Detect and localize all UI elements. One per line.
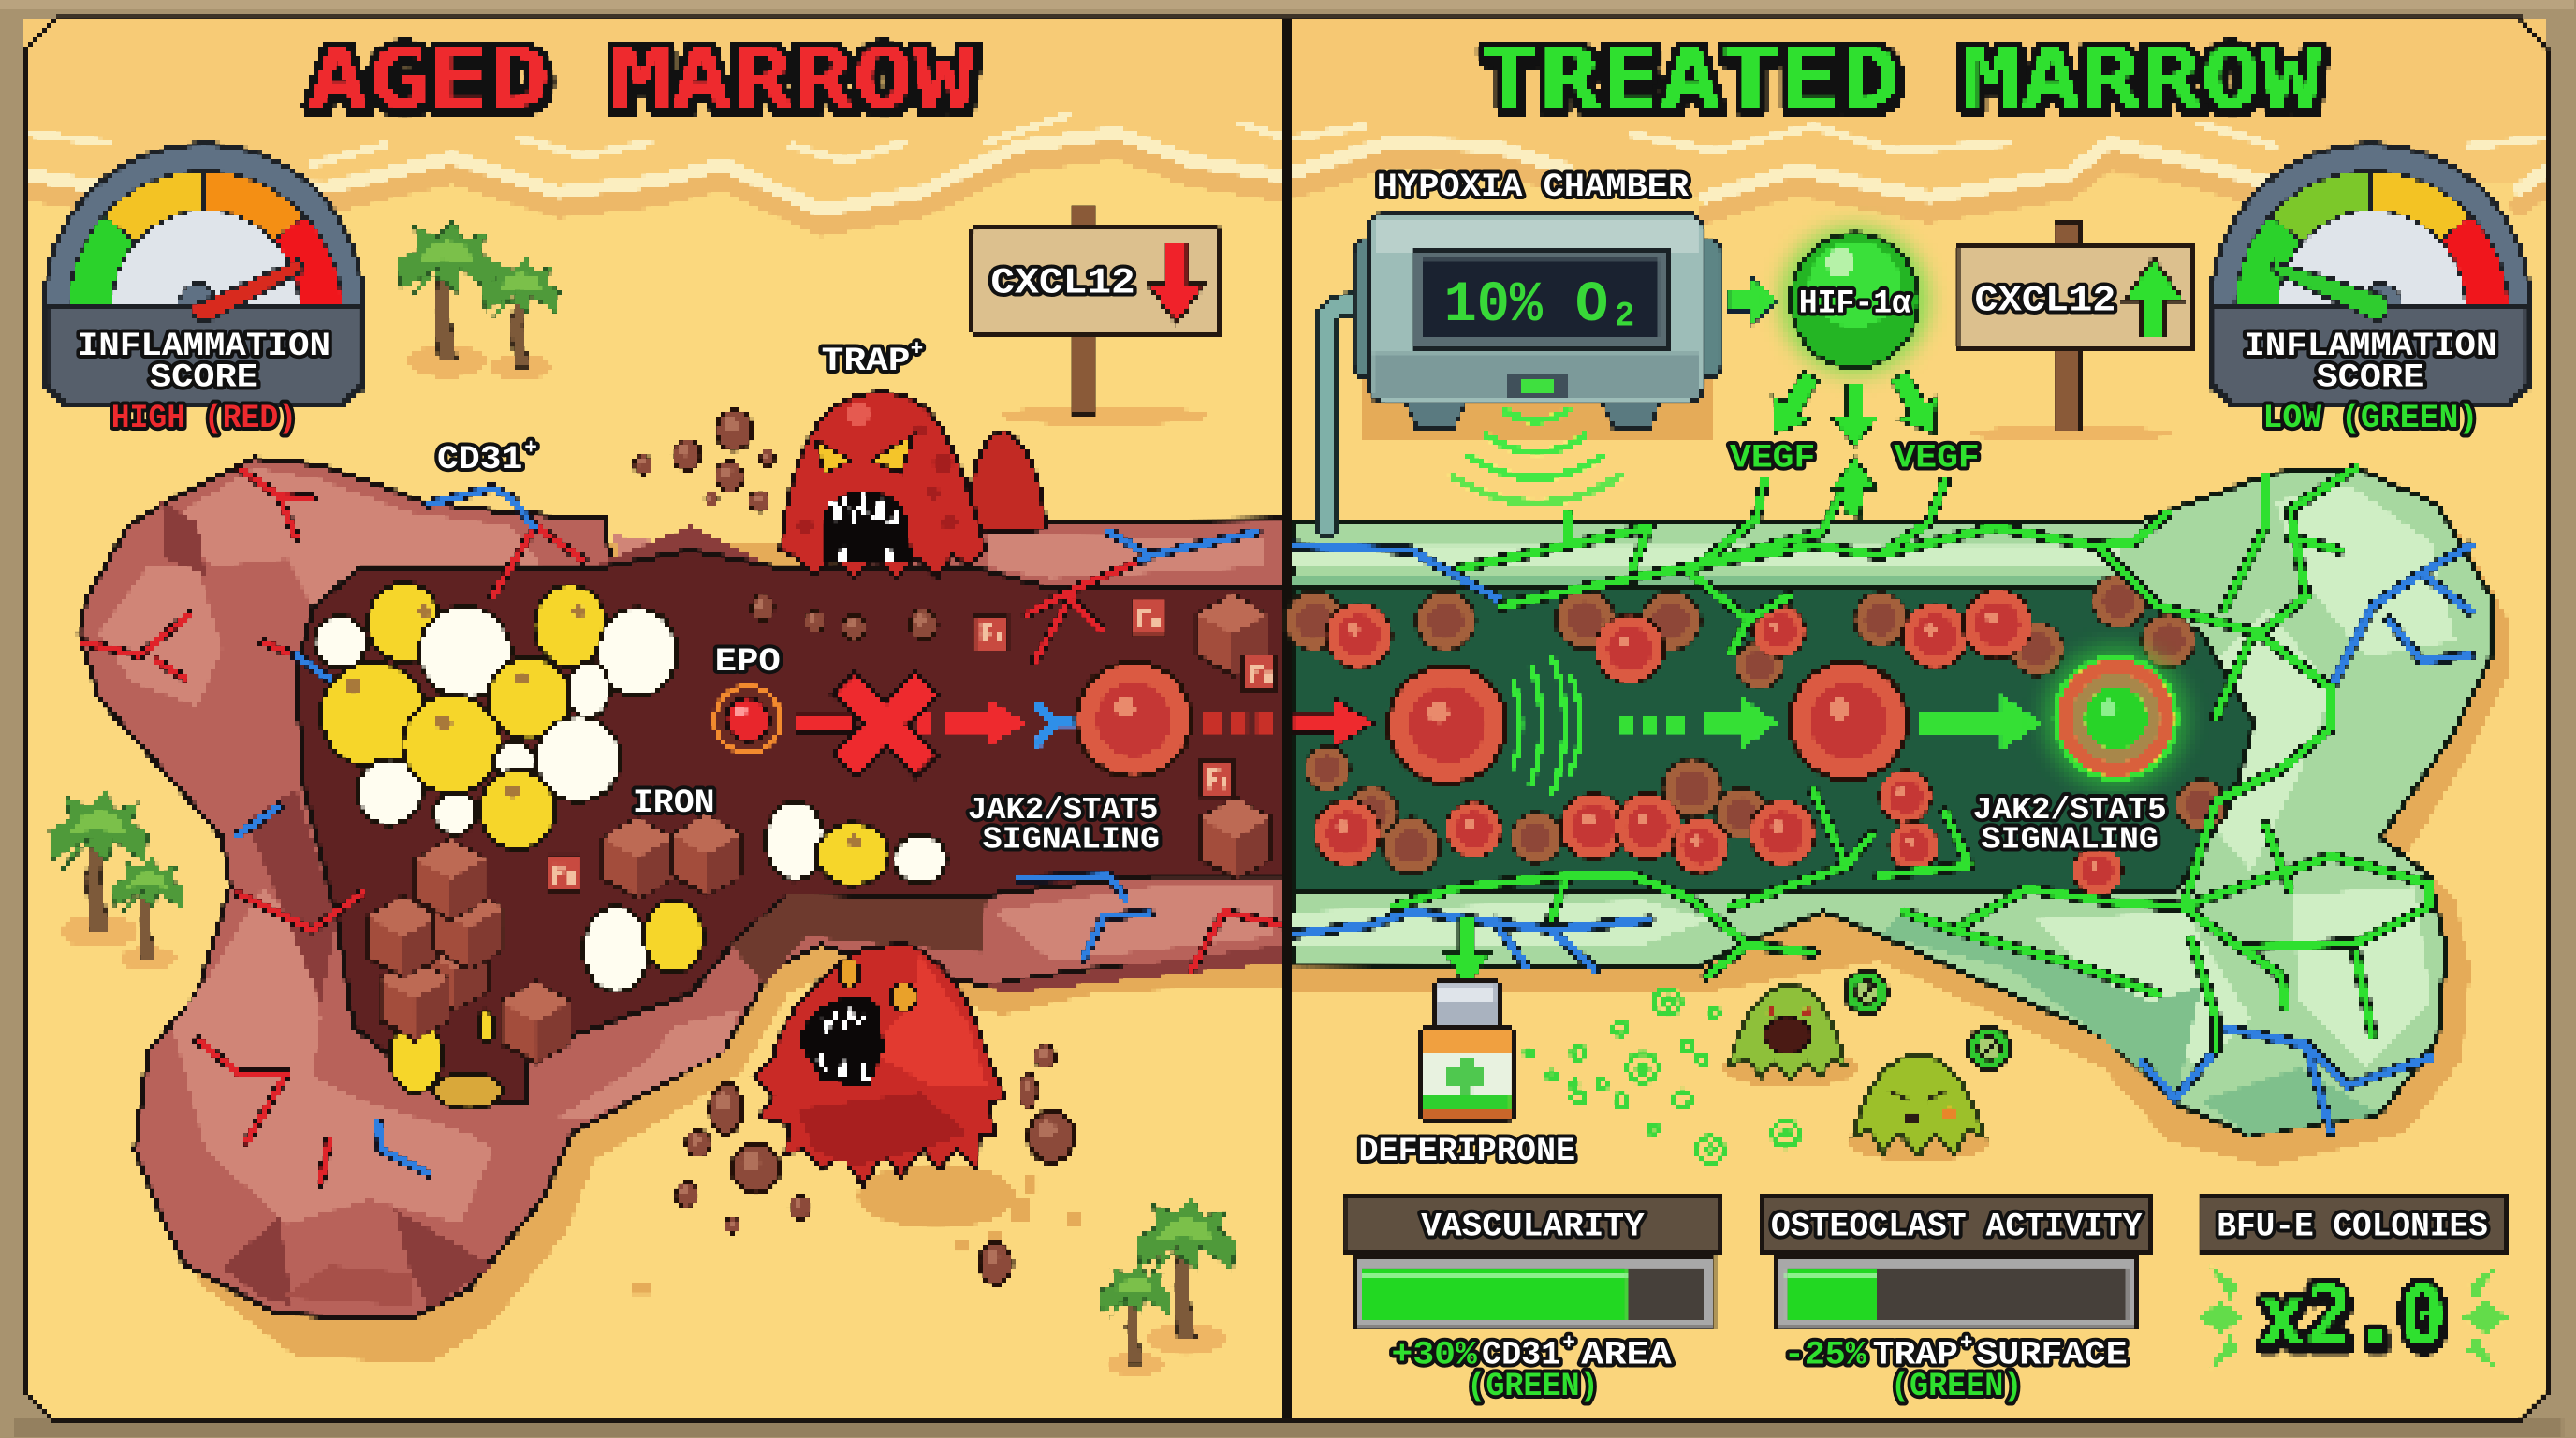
text: gauge status high: HIGH (RED) bbox=[111, 400, 297, 437]
text: EPO: EPO bbox=[715, 643, 781, 681]
text: VEGF right: VEGF bbox=[1894, 439, 1980, 477]
panel: treated marrow background bbox=[1288, 0, 2548, 1419]
text: signaling treated: JAK2/STAT5 bbox=[1973, 793, 2167, 829]
arrow: chamber to HIF bbox=[1728, 276, 1778, 325]
text: vascularity caption: +30% bbox=[1392, 1336, 1478, 1373]
EPO molecule bbox=[715, 686, 781, 753]
fat cells middle bbox=[766, 801, 946, 886]
bone light patches bbox=[99, 468, 1273, 1224]
blood cells bottom row bbox=[1305, 747, 2226, 895]
text: signaling aged: SIGNALING bbox=[983, 822, 1160, 858]
text: TRAP+: + bbox=[911, 337, 923, 361]
vessels treated green bbox=[1395, 468, 2430, 1049]
sign: CXCL12 up bbox=[1956, 222, 2193, 442]
value: x2.0 bbox=[2259, 1268, 2446, 1363]
arrow: green to activated cell bbox=[1917, 695, 2042, 751]
text: chamber screen readout: 10% O₂ bbox=[1444, 273, 1641, 338]
VEGF arrows bbox=[1773, 372, 1937, 518]
text: signaling treated bbox=[1973, 793, 2167, 858]
text: HIF-1a: HIF-1α bbox=[1799, 285, 1911, 322]
text: CD31+ bbox=[437, 435, 537, 478]
text: osteoclast caption: + bbox=[1960, 1331, 1973, 1356]
angry eyes bbox=[815, 435, 914, 473]
metric: osteoclast activity panel bbox=[1761, 1197, 2152, 1329]
debris inside cavity bbox=[751, 595, 937, 640]
HIF-1a sphere bbox=[1779, 225, 1930, 376]
dashed signal aged bbox=[1205, 713, 1273, 733]
text: gauge label high: SCORE bbox=[150, 359, 258, 396]
text: CD31+: + bbox=[524, 435, 537, 460]
vessels treated blue bbox=[1288, 546, 2470, 1132]
erythroid progenitor aged bbox=[1076, 662, 1191, 777]
text: signaling aged bbox=[968, 793, 1160, 858]
title: aged marrow: AGED MARROW bbox=[307, 31, 974, 126]
text: deferiprone: DEFERIPRONE bbox=[1358, 1133, 1575, 1170]
text: gauge label low: SCORE bbox=[2316, 359, 2424, 396]
fanged mouth bbox=[798, 996, 884, 1088]
marrow cavity: aged bbox=[296, 550, 1283, 1104]
text: gauge status low: LOW (GREEN) bbox=[2262, 400, 2478, 437]
iron cubes bbox=[368, 594, 1270, 1063]
debris upper bbox=[634, 411, 775, 512]
marrow cavity: treated bbox=[1293, 588, 2254, 890]
progenitor treated 1 bbox=[1388, 666, 1506, 784]
gauge: inflammation score high bbox=[45, 144, 363, 405]
text: vascularity heading: VASCULARITY bbox=[1421, 1209, 1645, 1246]
oxygen pipe bbox=[1327, 304, 1357, 526]
text: VEGF left: VEGF bbox=[1730, 439, 1815, 477]
bar bbox=[1354, 1258, 1713, 1329]
bone dark patches bbox=[1293, 575, 2380, 1136]
text: osteoclast caption: -25% bbox=[1784, 1336, 1867, 1373]
arrow: into vial bbox=[1444, 917, 1490, 989]
panel: aged marrow background bbox=[25, 0, 1283, 1419]
bone light patches bbox=[1293, 485, 2456, 1068]
vessels aged bbox=[82, 468, 1281, 1182]
gauge needle bbox=[178, 259, 304, 322]
arrow: down red bbox=[1147, 243, 1206, 324]
arrow: red entry bbox=[1293, 698, 1373, 747]
osteoclast: TRAP monster top bbox=[781, 392, 1045, 579]
sparkles bbox=[2198, 1265, 2509, 1370]
text: CD31+: CD31 bbox=[437, 441, 522, 478]
activated erythroid cell bbox=[2043, 646, 2188, 790]
green signal dashes and arrow bbox=[1618, 697, 1778, 749]
text: TRAP+ bbox=[822, 337, 923, 380]
gauge: inflammation score low bbox=[2211, 144, 2530, 405]
arrow: up green bbox=[2124, 257, 2183, 337]
hypoxia chamber bbox=[1354, 213, 1721, 439]
angry eyes bbox=[840, 958, 916, 1012]
fat cells lower bbox=[389, 901, 703, 1108]
bone dark patches bbox=[161, 501, 1283, 1310]
text: osteoclast caption: TRAP bbox=[1873, 1336, 1958, 1373]
palm trees upper left bbox=[398, 220, 560, 380]
text: osteoclast caption bbox=[1784, 1331, 2128, 1405]
text: osteoclast heading: OSTEOCLAST ACTIVITY bbox=[1771, 1209, 2142, 1246]
debris lower bbox=[675, 1045, 1075, 1284]
blood cells top row bbox=[1284, 575, 2195, 689]
osteoclast: monster bottom bbox=[753, 943, 1005, 1186]
receptor bbox=[1038, 707, 1075, 742]
text: gauge label low bbox=[2244, 328, 2496, 396]
fat cells cluster bbox=[314, 583, 677, 849]
text: vascularity caption bbox=[1392, 1331, 1673, 1405]
bone: treated bbox=[1293, 468, 2507, 1167]
fanged mouth bbox=[822, 490, 912, 562]
icon: red X bbox=[833, 672, 938, 777]
metric: vascularity panel bbox=[1344, 1197, 1721, 1329]
text: gauge label low: INFLAMMATION bbox=[2244, 328, 2496, 365]
text: iron: IRON bbox=[633, 785, 715, 822]
text: vascularity caption: AREA bbox=[1581, 1336, 1673, 1373]
text: TRAP+: TRAP bbox=[822, 343, 910, 380]
text: gauge label high: INFLAMMATION bbox=[78, 328, 330, 365]
palm trees lower left bbox=[50, 790, 183, 970]
ground dust bbox=[633, 1163, 1081, 1295]
iron tags bbox=[548, 599, 1277, 892]
green signal waves bbox=[1513, 657, 1580, 792]
chamber screen bbox=[1412, 250, 1667, 348]
progenitor treated 2 bbox=[1789, 662, 1908, 780]
title: treated marrow: TREATED MARROW bbox=[1480, 31, 2321, 126]
bone: aged bbox=[80, 459, 1283, 1363]
tamed osteoclast 2 bbox=[1847, 1055, 1991, 1162]
arrow: blocked pathway bbox=[796, 698, 1027, 747]
iron chelator particles bbox=[1526, 989, 1799, 1163]
text: sign CXCL12 down: CXCL12 bbox=[990, 262, 1135, 303]
text: signaling treated: SIGNALING bbox=[1981, 822, 2159, 858]
text: sign CXCL12 up: CXCL12 bbox=[1974, 281, 2115, 322]
icon: inhibited 2 bbox=[1968, 1027, 2011, 1069]
palm trees lower right bbox=[1100, 1197, 1236, 1376]
text: signaling aged: JAK2/STAT5 bbox=[968, 793, 1158, 829]
text: osteoclast caption: (GREEN) bbox=[1891, 1368, 2022, 1405]
deferiprone vial bbox=[1419, 981, 1515, 1121]
text: vascularity caption: CD31 bbox=[1482, 1336, 1560, 1373]
hypoxia waves bbox=[1452, 411, 1619, 503]
icon: inhibited 1 bbox=[1845, 971, 1887, 1014]
metric: BFU-E colonies panel bbox=[2198, 1197, 2509, 1370]
sign: CXCL12 down bbox=[973, 205, 1221, 425]
text: vascularity caption: + bbox=[1562, 1331, 1575, 1356]
gauge needle bbox=[2270, 261, 2402, 320]
text: osteoclast caption: SURFACE bbox=[1976, 1336, 2128, 1373]
tamed osteoclast 1 bbox=[1721, 986, 1860, 1088]
text: BFU-E heading: BFU-E COLONIES bbox=[2217, 1209, 2488, 1246]
bar bbox=[1776, 1258, 2137, 1329]
text: vascularity caption: (GREEN) bbox=[1467, 1368, 1599, 1405]
text: hypoxia chamber: HYPOXIA CHAMBER bbox=[1377, 169, 1690, 206]
text: gauge label high bbox=[78, 328, 330, 396]
